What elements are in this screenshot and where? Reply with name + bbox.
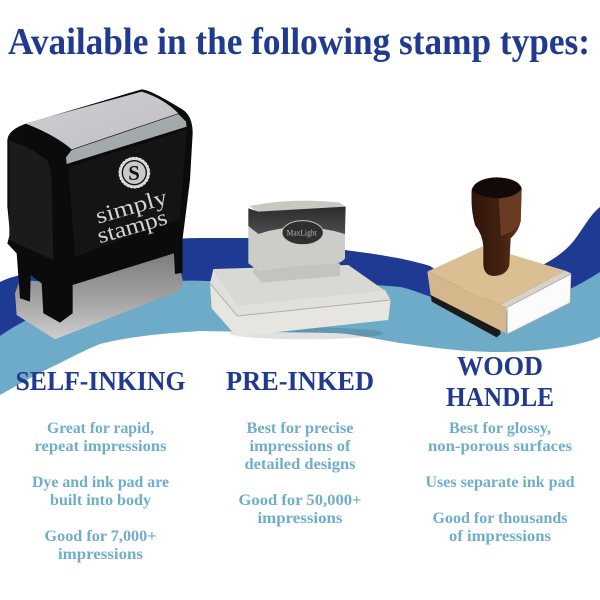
handle grey — [248, 208, 345, 272]
description: Good for 7,000+ — [44, 528, 156, 545]
description: built into body — [50, 492, 151, 509]
knob top — [472, 177, 522, 198]
neck — [253, 263, 340, 283]
description: repeat impressions — [34, 438, 166, 455]
top window — [25, 92, 178, 149]
description — [238, 420, 362, 527]
description: impressions — [258, 510, 342, 527]
description: Great for rapid, — [47, 420, 154, 437]
description: Best for glossy, — [449, 420, 551, 437]
description: Uses separate ink pad — [426, 474, 575, 491]
heading — [446, 351, 554, 412]
front panel — [68, 129, 187, 257]
heading: SELF-INKING — [16, 366, 186, 396]
description: Best for precise — [246, 420, 354, 437]
description: Good for thousands — [432, 510, 568, 527]
side grip — [9, 141, 53, 260]
handle — [471, 177, 522, 276]
badge: MaxLight — [287, 229, 317, 238]
column: self-inking — [16, 366, 186, 563]
base seam — [210, 283, 391, 316]
brand text: simply — [93, 184, 171, 229]
heading: HANDLE — [446, 382, 554, 412]
description: Dye and ink pad are — [32, 474, 169, 491]
base bottom band — [210, 283, 391, 337]
rubber strip — [431, 295, 501, 337]
clear base — [15, 247, 183, 339]
label — [507, 274, 571, 334]
column: pre-inked — [226, 366, 374, 527]
emblem — [119, 157, 150, 188]
wood top — [427, 246, 565, 305]
shadow — [230, 327, 383, 339]
handle cap — [248, 207, 346, 234]
description: impressions — [58, 546, 143, 563]
description — [32, 420, 169, 563]
handle lit face — [499, 189, 522, 236]
column: wood handle — [426, 351, 575, 545]
label rim — [500, 271, 571, 307]
description — [426, 420, 575, 545]
wood front — [427, 272, 507, 333]
background waves — [0, 207, 600, 395]
emblem: S — [128, 163, 140, 185]
stamp: wood handle — [427, 177, 571, 337]
base upper front — [210, 269, 391, 316]
black body — [7, 89, 193, 323]
base top — [213, 265, 385, 306]
badge — [282, 221, 323, 245]
stamp: self-inking — [7, 89, 193, 339]
heading: WOOD — [457, 351, 543, 381]
brand text: stamps — [94, 204, 170, 248]
brand text — [89, 184, 176, 248]
description: impressions of — [250, 438, 351, 455]
handle top face — [249, 201, 346, 213]
description: Good for 50,000+ — [238, 492, 362, 509]
heading: PRE-INKED — [226, 366, 374, 396]
description: of impressions — [449, 528, 551, 545]
description: detailed designs — [244, 456, 356, 473]
stamp: pre-inked — [210, 201, 391, 339]
window glass strip — [66, 114, 187, 164]
description: non-porous surfaces — [428, 438, 572, 455]
